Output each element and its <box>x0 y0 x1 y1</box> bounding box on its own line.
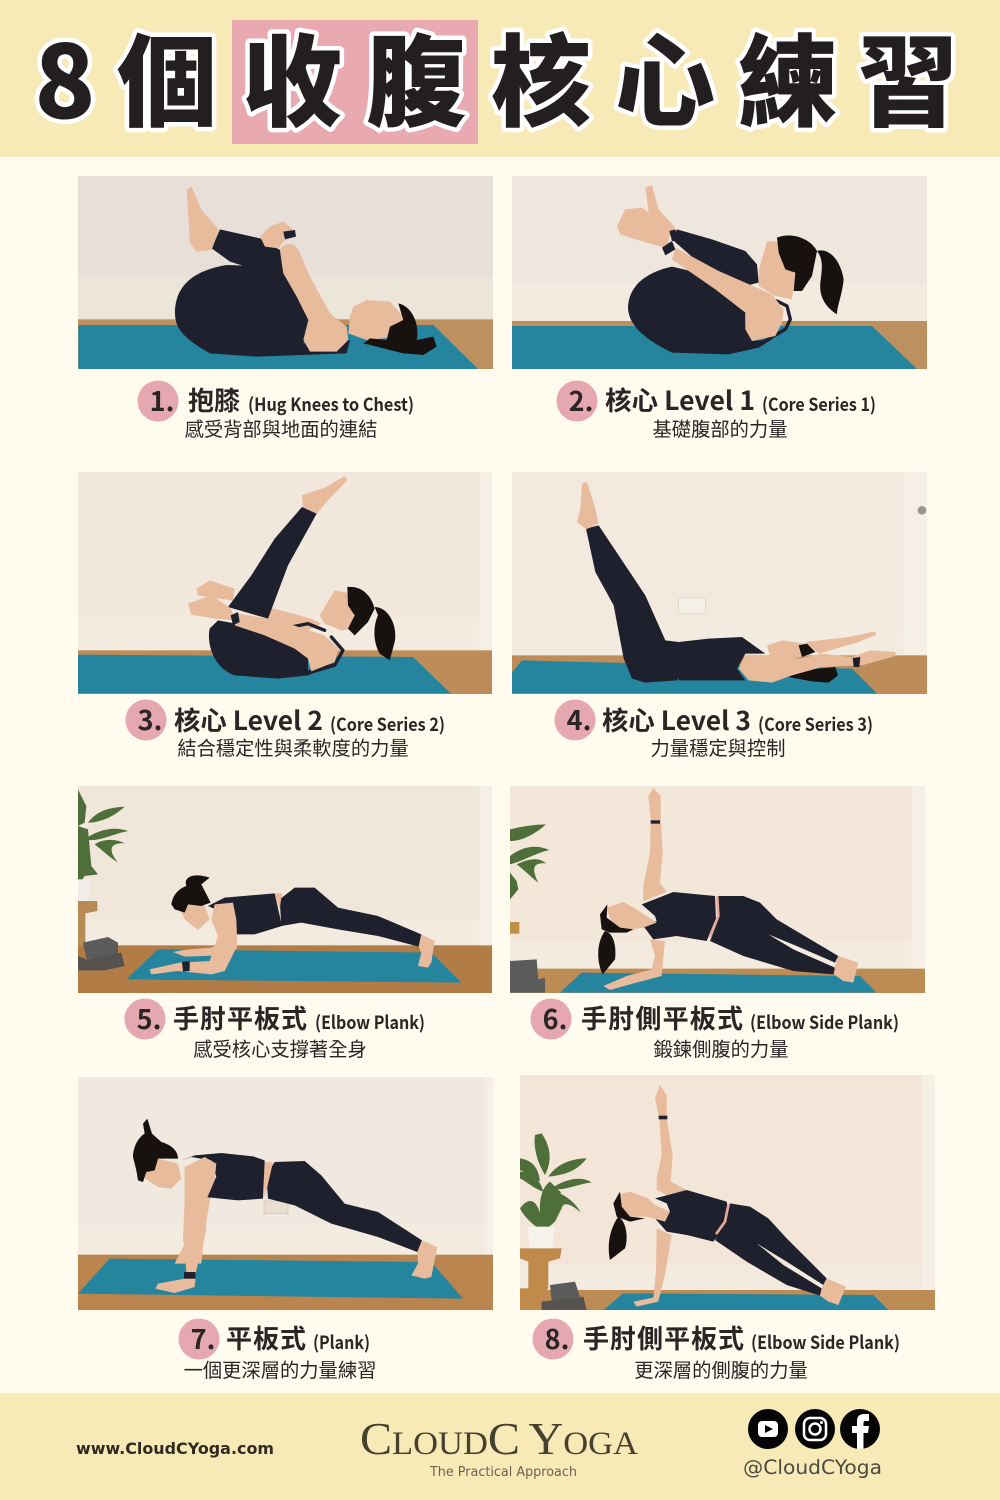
step title 6: (Elbow Side Plank) <box>750 1009 899 1035</box>
step description 7: 一個更深層的力量練習 <box>184 1355 376 1383</box>
step title 4: 4. <box>567 699 591 738</box>
title banner: 腹 <box>366 2 466 147</box>
step title 5: (Elbow Plank) <box>315 1009 425 1035</box>
logo: The Practical Approach <box>429 1465 577 1480</box>
website url: www.CloudCYoga.com <box>76 1439 274 1458</box>
title banner: 心 <box>615 2 715 147</box>
step description 1: 感受背部與地面的連結 <box>185 414 377 442</box>
step description 6: 鍛鍊側腹的力量 <box>654 1034 788 1062</box>
photo: core series 2 <box>78 472 495 695</box>
icon: facebook <box>840 1409 880 1449</box>
photo: core series 1 <box>512 176 929 369</box>
step title 1 <box>138 380 414 422</box>
step title 5: 5. <box>137 998 161 1037</box>
step title 8: 8. <box>545 1318 569 1357</box>
title banner <box>0 0 1000 157</box>
title banner: 核 <box>491 2 591 147</box>
panel: exercise 1 <box>70 170 510 442</box>
step title 6 <box>530 998 899 1040</box>
step title 2: 2. <box>569 380 593 419</box>
step title 2: 核心 Level 1 <box>605 381 755 418</box>
photo: core series 3 <box>512 472 929 695</box>
step title 5: 手肘平板式 <box>173 999 307 1036</box>
title banner: 8 <box>35 2 95 147</box>
step description 3: 結合穩定性與柔軟度的力量 <box>177 733 409 761</box>
photo: side plank <box>520 1075 937 1312</box>
logo: CLOUDC YOGA <box>360 1413 638 1464</box>
step title 5 <box>124 998 425 1040</box>
step title 7: 平板式 <box>226 1319 306 1356</box>
icon: instagram <box>795 1409 835 1449</box>
step title 6: 6. <box>543 998 567 1037</box>
photo: plank <box>78 1077 495 1310</box>
step title 1: (Hug Knees to Chest) <box>248 391 414 417</box>
step title 4: (Core Series 3) <box>758 711 873 737</box>
footer band <box>0 1393 1000 1500</box>
photo: elbow side plank <box>510 786 927 994</box>
step title 8: (Elbow Side Plank) <box>751 1329 900 1355</box>
step description 5: 感受核心支撐著全身 <box>193 1034 367 1062</box>
step title 3: 核心 Level 2 <box>174 701 323 738</box>
step title 7: (Plank) <box>313 1329 370 1355</box>
step title 7 <box>178 1318 370 1360</box>
step title 1: 抱膝 <box>188 381 240 418</box>
step title 3: 3. <box>138 699 162 738</box>
panel: exercise 6 <box>510 786 927 1062</box>
step description 4: 力量穩定與控制 <box>651 733 785 761</box>
step title 3 <box>126 699 445 740</box>
icon: youtube <box>748 1409 788 1449</box>
title banner: 習 <box>858 2 958 147</box>
step title 3: (Core Series 2) <box>330 711 445 737</box>
step title 8 <box>532 1318 900 1360</box>
step title 2: (Core Series 1) <box>762 391 876 417</box>
title banner: 收 <box>242 2 342 147</box>
step title 7: 7. <box>191 1318 215 1357</box>
title banner: 練 <box>738 2 838 147</box>
step title 8: 手肘側平板式 <box>583 1319 744 1356</box>
step title 4: 核心 Level 3 <box>602 701 751 738</box>
step title 6: 手肘側平板式 <box>581 999 743 1036</box>
step description 8: 更深層的側腹的力量 <box>634 1355 808 1383</box>
step description 2: 基礎腹部的力量 <box>653 414 787 442</box>
social handle: @CloudCYoga <box>743 1456 882 1479</box>
title banner: 個 <box>117 2 217 147</box>
step title 1: 1. <box>150 380 174 419</box>
panel: exercise 7 <box>78 1077 495 1383</box>
panel: exercise 3 <box>78 472 495 761</box>
step title 2 <box>556 380 876 422</box>
panel: exercise 2 <box>512 176 929 442</box>
photo: hug knees to chest <box>78 176 493 369</box>
panel: exercise 4 <box>512 472 929 761</box>
panel: exercise 8 <box>520 1075 937 1383</box>
step title 4 <box>554 699 873 740</box>
panel: exercise 5 <box>78 786 495 1062</box>
photo: elbow plank <box>78 786 495 994</box>
